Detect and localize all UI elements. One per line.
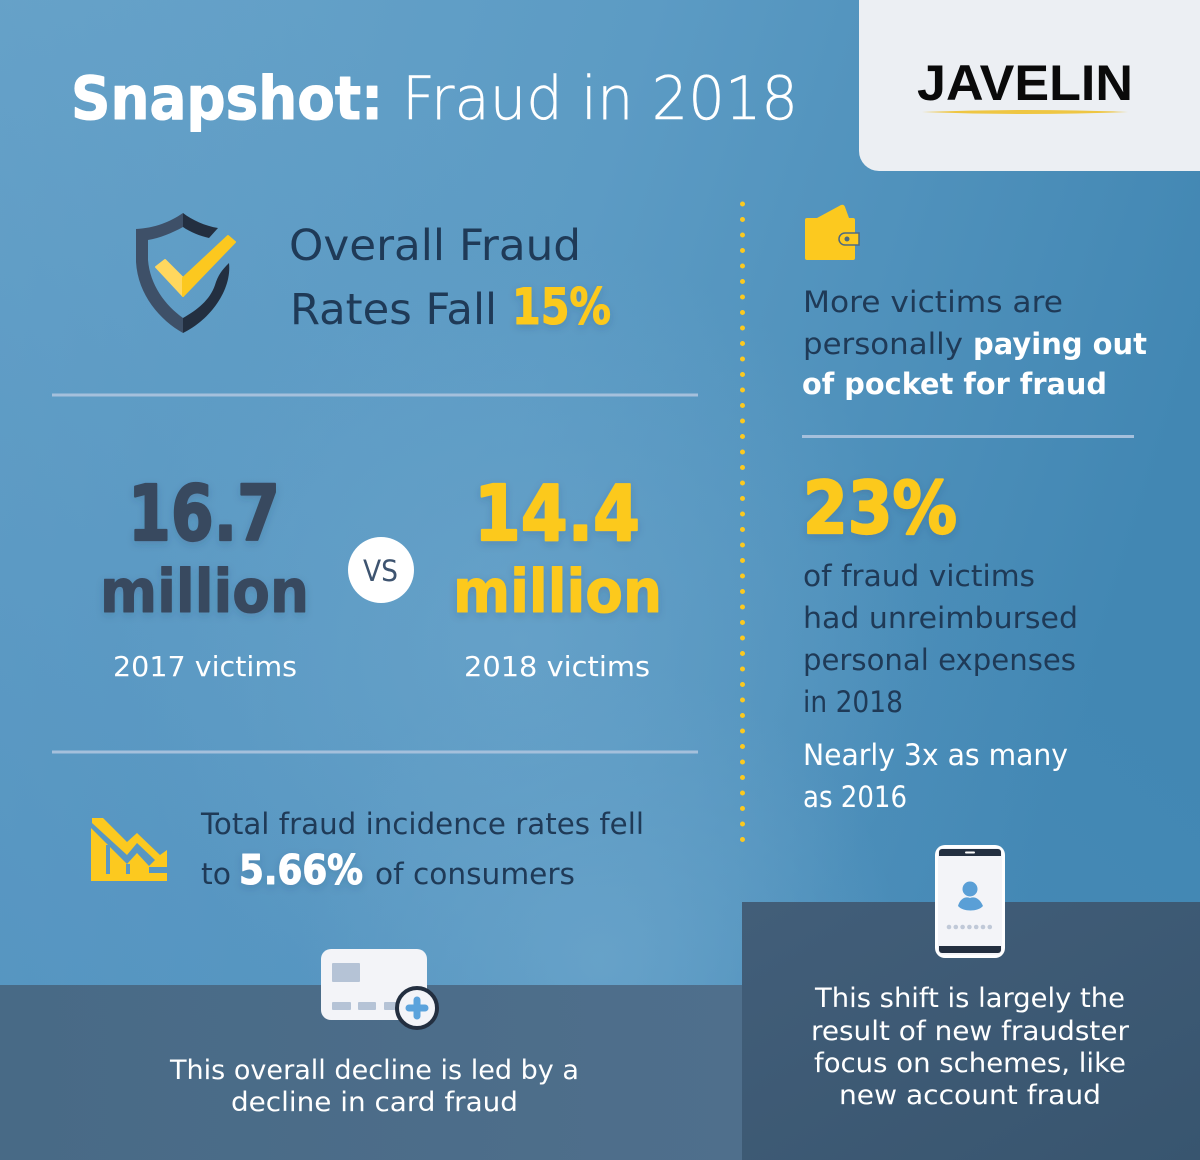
text: unreimbursed expenses: in 2018 [803,685,903,719]
stat: 2018 victims: 14.4 [474,470,640,559]
text: paying out of pocket: More victims are [803,285,1063,319]
heading: overall fraud rates: Rates Fall [290,285,497,335]
icon: credit card [321,949,437,1028]
text: nearly 3x [803,738,1068,814]
panel: bottom right [742,902,1200,1160]
text: unreimbursed expenses: personal expenses [803,643,1076,677]
heading: overall fraud rates: 15% [512,278,611,336]
text: card fraud decline: decline in card fraud [231,1087,518,1118]
icon: shield with check [136,213,235,333]
stat: 2017 victims: 16.7 [128,470,280,559]
stat: 2017 victims: million [100,557,309,627]
text: nearly 3x: as 2016 [803,780,907,814]
text: unreimbursed expenses: had unreimbursed [803,601,1078,635]
text: card fraud decline: This overall decline is led by a [169,1055,579,1086]
text: fraudster focus shift: This shift is largely the [814,983,1125,1014]
heading: overall fraud rates [289,221,611,336]
text: paying out of pocket [802,285,1147,401]
stat: 2017 victims: 2017 victims [113,650,297,683]
text: nearly 3x: Nearly 3x as many [803,738,1068,772]
vs badge [348,537,414,603]
stat: 23 percent: 23% [803,466,957,550]
icon: wallet [805,205,859,260]
title: Fraud in 2018 [402,64,798,134]
stat: 2017 victims [100,470,309,683]
text: fraudster focus shift: result of new fraudster [811,1016,1130,1047]
text: total fraud incidence: of consumers [375,857,575,891]
text: total fraud incidence: to [201,857,231,891]
text: total fraud incidence [200,807,644,894]
heading: overall fraud rates: Overall Fraud [289,221,581,271]
icon: phone with user [935,845,1005,958]
title: Snapshot: [71,64,383,134]
text: paying out of pocket: of pocket for fraud [802,367,1107,401]
text: paying out of pocket: personally [803,327,963,361]
stat: 2018 victims: 2018 victims [464,650,650,683]
text: total fraud incidence: 5.66% [239,846,363,894]
dotted divider [740,204,745,840]
text: total fraud incidence: Total fraud incidence rates fell [200,807,644,841]
text: card fraud decline [169,1055,579,1118]
title [71,64,798,134]
text: unreimbursed expenses: of fraud victims [803,559,1035,593]
text: unreimbursed expenses [803,559,1078,719]
vs badge: VS [363,554,398,588]
stat: 2018 victims: million [453,557,662,627]
panel: bottom left [0,985,742,1160]
text: fraudster focus shift: focus on schemes, like [814,1048,1126,1079]
text: fraudster focus shift: new account fraud [839,1080,1101,1111]
icon: falling chart [91,818,167,881]
stat: 2018 victims [453,470,662,683]
text: fraudster focus shift [811,983,1130,1111]
text: paying out of pocket: paying out [973,327,1147,361]
logo panel: JAVELIN [917,55,1133,111]
logo panel [859,0,1200,171]
